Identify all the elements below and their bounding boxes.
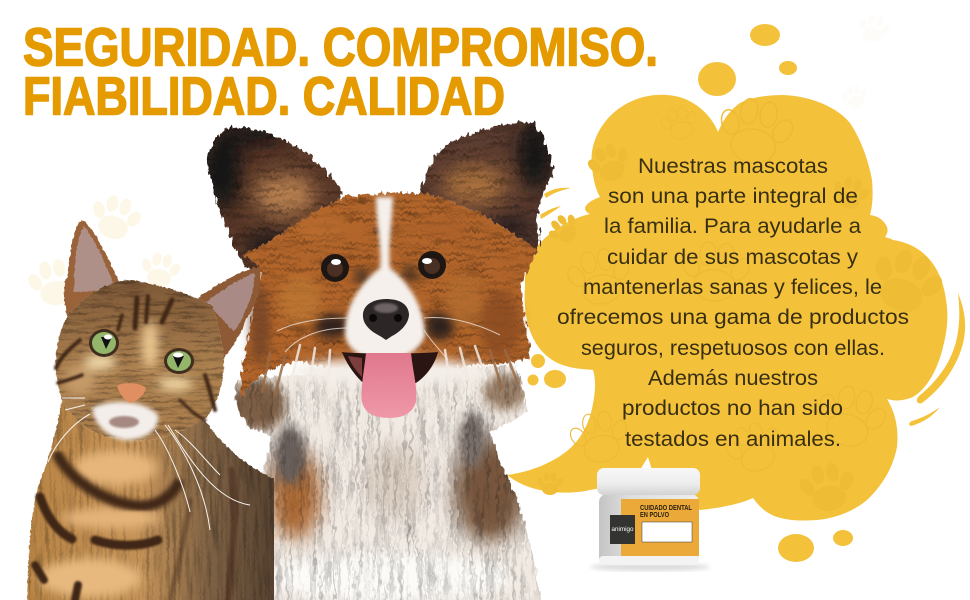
speech cloud <box>507 94 952 521</box>
jar label heading: CUIDADO DENTAL <box>640 503 692 512</box>
body text: productos no han sido <box>622 397 843 420</box>
jar info box <box>642 522 692 542</box>
body text: seguros, respetuosos con ellas. <box>581 337 885 360</box>
body text: cuidar de sus mascotas y <box>607 246 859 269</box>
jar orange label <box>621 499 699 556</box>
body text: Además nuestros <box>648 367 818 390</box>
cat whiskers <box>48 398 250 530</box>
cat nose <box>117 383 146 403</box>
jar body <box>599 494 699 565</box>
cat light fur patches <box>38 321 193 598</box>
cat eyes <box>89 329 194 374</box>
paw pattern inside cloud <box>536 138 952 516</box>
jar label heading: EN POLVO <box>640 510 669 519</box>
body text <box>557 155 909 451</box>
dog mouth <box>342 352 438 384</box>
body text: la familia. Para ayudarle a <box>604 215 861 238</box>
decorative yellow droplets and swooshes <box>528 24 965 562</box>
cat markings <box>35 296 234 600</box>
title <box>23 18 658 126</box>
dog whiskers <box>277 317 500 360</box>
dog nose <box>363 299 409 340</box>
faint background paw prints <box>23 11 893 310</box>
dog tongue <box>361 353 416 418</box>
dog white blaze and muzzle <box>345 197 425 360</box>
title: SEGURIDAD. COMPROMISO. <box>23 18 658 78</box>
cat ears <box>64 220 261 362</box>
title: FIABILIDAD. CALIDAD <box>23 66 505 126</box>
jar logo panel: animigo <box>612 527 634 533</box>
cat muzzle <box>92 402 158 440</box>
jar lid <box>597 468 700 495</box>
jar label heading <box>640 503 692 519</box>
dog face shading <box>250 216 520 386</box>
dog ears <box>202 119 553 270</box>
cat body <box>27 400 280 600</box>
dog chest fur <box>230 365 545 600</box>
body text: testados en animales. <box>625 428 841 451</box>
body text: Nuestras mascotas <box>638 155 828 178</box>
jar shadow <box>590 563 710 571</box>
dog head <box>240 193 537 398</box>
body text: ofrecemos una gama de productos <box>557 306 909 329</box>
illustration: dog <box>202 119 553 600</box>
cat head <box>56 280 224 440</box>
dog eyes <box>321 251 446 282</box>
body text: mantenerlas sanas y felices, le <box>583 276 882 299</box>
body text: son una parte integral de <box>608 185 858 208</box>
product jar <box>590 468 710 571</box>
dog neck fur strands <box>262 345 518 395</box>
illustration: cat <box>27 220 280 600</box>
jar white band <box>599 556 699 565</box>
